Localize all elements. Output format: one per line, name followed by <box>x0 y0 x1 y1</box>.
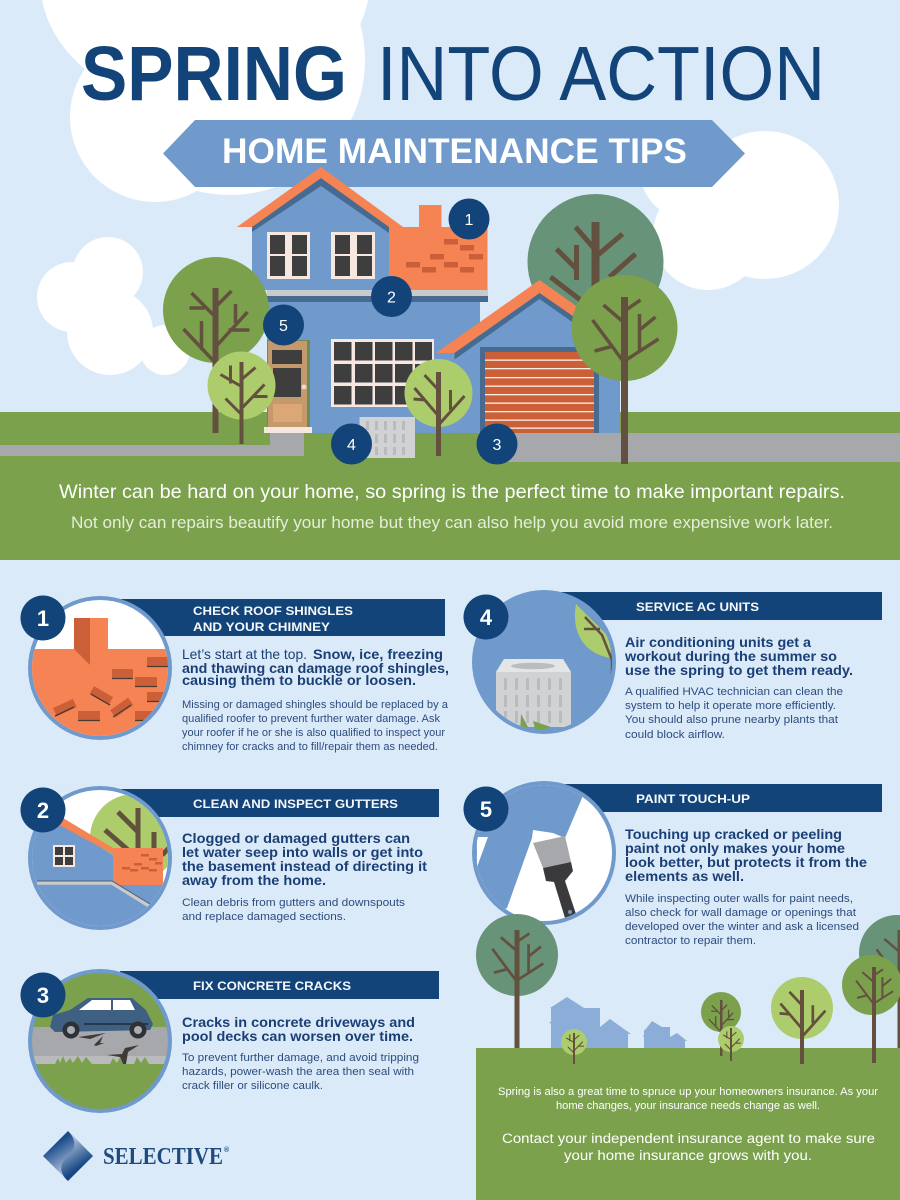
detail text <box>182 897 406 923</box>
title: INTO ACTION <box>377 31 825 117</box>
header bar: CLEAN AND INSPECT GUTTERS <box>193 797 398 811</box>
detail text: chimney for cracks and to fill/repair them as needed. <box>182 741 438 753</box>
number badge: 5 <box>480 797 492 822</box>
detail text: crack filler or silicone caulk. <box>182 1080 323 1092</box>
closing message: home changes, your insurance needs change as well. <box>556 1100 820 1112</box>
ac unit <box>360 417 415 458</box>
number badge: 2 <box>37 798 49 823</box>
lead text: and thawing can damage roof shingles, <box>182 660 449 676</box>
detail text: To prevent further damage, and avoid tripping <box>182 1052 419 1064</box>
header bar: SERVICE AC UNITS <box>636 600 759 614</box>
front door <box>264 340 312 433</box>
lead text: workout during the summer so <box>624 648 837 664</box>
tree: left mid green <box>163 257 269 433</box>
detail text: also check for wall damage or openings that <box>625 907 856 919</box>
closing message <box>498 1086 878 1163</box>
header bar <box>120 599 445 636</box>
number badge: 3 <box>37 983 49 1008</box>
detail text: contractor to repair them. <box>625 935 756 947</box>
house scene <box>0 172 900 560</box>
lead text: elements as well. <box>625 868 744 884</box>
illustration: gutter <box>28 786 178 930</box>
detail text: hazards, power-wash the area then seal with <box>182 1066 414 1078</box>
banner: home maintenance tips: HOME MAINTENANCE TIPS <box>222 132 687 171</box>
lead text: Clogged or damaged gutters can <box>182 830 410 846</box>
detail text: system to help it operate more efficiently. <box>625 700 836 712</box>
lead text: Touching up cracked or peeling <box>625 826 842 842</box>
logo: selective: SELECTIVE <box>103 1144 223 1170</box>
illustration: ac unit <box>472 590 616 734</box>
header bar: FIX CONCRETE CRACKS <box>193 979 351 993</box>
lead text <box>182 646 449 688</box>
detail text <box>625 686 843 741</box>
intro text: Not only can repairs beautify your home but they can also help you avoid more expensive work later. <box>71 514 833 532</box>
tree: center light green <box>404 359 472 456</box>
house marker 2 <box>371 276 412 317</box>
tree: teal right <box>859 915 900 1050</box>
tree: small light <box>718 1026 744 1061</box>
back lawn <box>0 412 900 445</box>
illustration: car and crack <box>28 969 172 1113</box>
tree: left light green <box>208 352 276 444</box>
header bar: CHECK ROOF SHINGLES <box>193 604 353 618</box>
number badge <box>20 788 66 832</box>
lead text: paint not only makes your home <box>625 840 845 856</box>
number badge: 1 <box>37 606 49 631</box>
lead text <box>182 1014 415 1044</box>
gutter <box>267 290 488 302</box>
panel 3: concrete cracks <box>20 969 439 1113</box>
illustration: roof <box>28 596 172 740</box>
front lawn <box>0 433 900 560</box>
title: SPRING <box>81 31 347 117</box>
lead text: Air conditioning units get a <box>625 634 811 650</box>
detail text: and replace damaged sections. <box>182 911 346 923</box>
panel 5: paint <box>464 781 882 947</box>
detail text: Clean debris from gutters and downspouts <box>182 897 406 909</box>
driveway <box>497 433 900 462</box>
header bar <box>560 592 882 620</box>
lead text: away from the home. <box>182 872 326 888</box>
lead text: the basement instead of directing it <box>182 858 427 874</box>
detail text <box>182 699 449 753</box>
upper house wall <box>252 172 389 290</box>
house marker 4: 4 <box>347 437 356 454</box>
lead text: Let’s start at the top. <box>182 646 307 662</box>
detail text: qualified roofer to prevent further water damage. Ask <box>182 713 440 725</box>
lead text <box>624 634 853 678</box>
tree: right mid green <box>572 275 678 464</box>
main roof over banner <box>237 167 403 233</box>
lead text: causing them to buckle or loosen. <box>182 672 416 688</box>
distant houses <box>549 997 687 1049</box>
closing message: your home insurance grows with you. <box>564 1148 812 1163</box>
detail text: While inspecting outer walls for paint needs, <box>625 893 853 905</box>
number badge <box>20 596 66 640</box>
lead text <box>625 826 867 884</box>
closing message: Spring is also a great time to spruce up your homeowners insurance. As your <box>498 1086 878 1098</box>
header bar: AND YOUR CHIMNEY <box>193 620 330 634</box>
header bar <box>560 784 882 812</box>
tree: mid green right <box>842 955 900 1063</box>
detail text: You should also prune nearby plants that <box>625 714 838 726</box>
car <box>50 998 153 1038</box>
detail text <box>182 1052 419 1092</box>
banner: home maintenance tips <box>163 120 745 187</box>
house marker 3: 3 <box>493 437 502 454</box>
tree: small light left <box>561 1029 587 1064</box>
lead text: Snow, ice, freezing <box>313 646 443 662</box>
logo: selective: ® <box>224 1146 230 1154</box>
garage <box>436 280 643 434</box>
panel 1: roof shingles <box>20 596 449 753</box>
walkway <box>0 433 304 456</box>
upper windows <box>267 232 375 279</box>
cloud: right <box>640 120 839 290</box>
cloud: small left <box>37 237 190 375</box>
detail text: could block airflow. <box>625 729 725 741</box>
closing message: Contact your independent insurance agent to make sure <box>502 1131 875 1146</box>
cloud: large top left <box>40 0 370 202</box>
lower house wall <box>267 300 480 434</box>
illustration: paint brush <box>472 781 616 925</box>
house marker 5: 5 <box>279 318 288 335</box>
number badge: 4 <box>480 605 493 630</box>
house marker 1: 1 <box>465 212 474 229</box>
house marker 2: 2 <box>387 290 396 306</box>
detail text: developed over the winter and ask a licensed <box>625 921 859 933</box>
house marker 3 <box>476 424 518 464</box>
lead text: Cracks in concrete driveways and <box>182 1014 415 1030</box>
lead text: look better, but protects it from the <box>625 854 867 870</box>
panel 4: ac units <box>464 590 882 741</box>
lead text: use the spring to get them ready. <box>625 662 853 678</box>
tree: teal left <box>476 914 558 1050</box>
green ground panel <box>476 1048 900 1200</box>
lead text: pool decks can worsen over time. <box>182 1028 413 1044</box>
logo: selective <box>43 1131 230 1181</box>
panel 2: gutters <box>20 786 439 930</box>
detail text <box>625 893 859 947</box>
detail text: your roofer if he or she is also qualified to inspect your <box>182 727 445 739</box>
house marker 4 <box>331 424 372 464</box>
tree: light green <box>771 977 833 1064</box>
header bar <box>120 789 439 817</box>
number badge <box>20 972 66 1018</box>
lead text <box>182 830 427 888</box>
intro text <box>59 481 845 532</box>
number badge <box>464 594 508 640</box>
detail text: Missing or damaged shingles should be replaced by a <box>182 699 449 711</box>
tree: small mid <box>701 992 741 1056</box>
header bar <box>120 971 439 999</box>
intro text: Winter can be hard on your home, so spring is the perfect time to make important repairs. <box>59 481 845 503</box>
number badge <box>464 786 508 832</box>
tree: back right teal <box>528 194 664 330</box>
lead text: let water seep into walls or get into <box>182 844 423 860</box>
header bar: PAINT TOUCH-UP <box>636 792 750 806</box>
detail text: A qualified HVAC technician can clean the <box>625 686 843 698</box>
chimney and roof block <box>389 205 488 290</box>
title <box>81 31 825 117</box>
house marker 5 <box>263 304 304 346</box>
big window <box>331 339 434 407</box>
bottom neighborhood scene <box>476 914 900 1200</box>
house marker 1 <box>448 198 490 240</box>
